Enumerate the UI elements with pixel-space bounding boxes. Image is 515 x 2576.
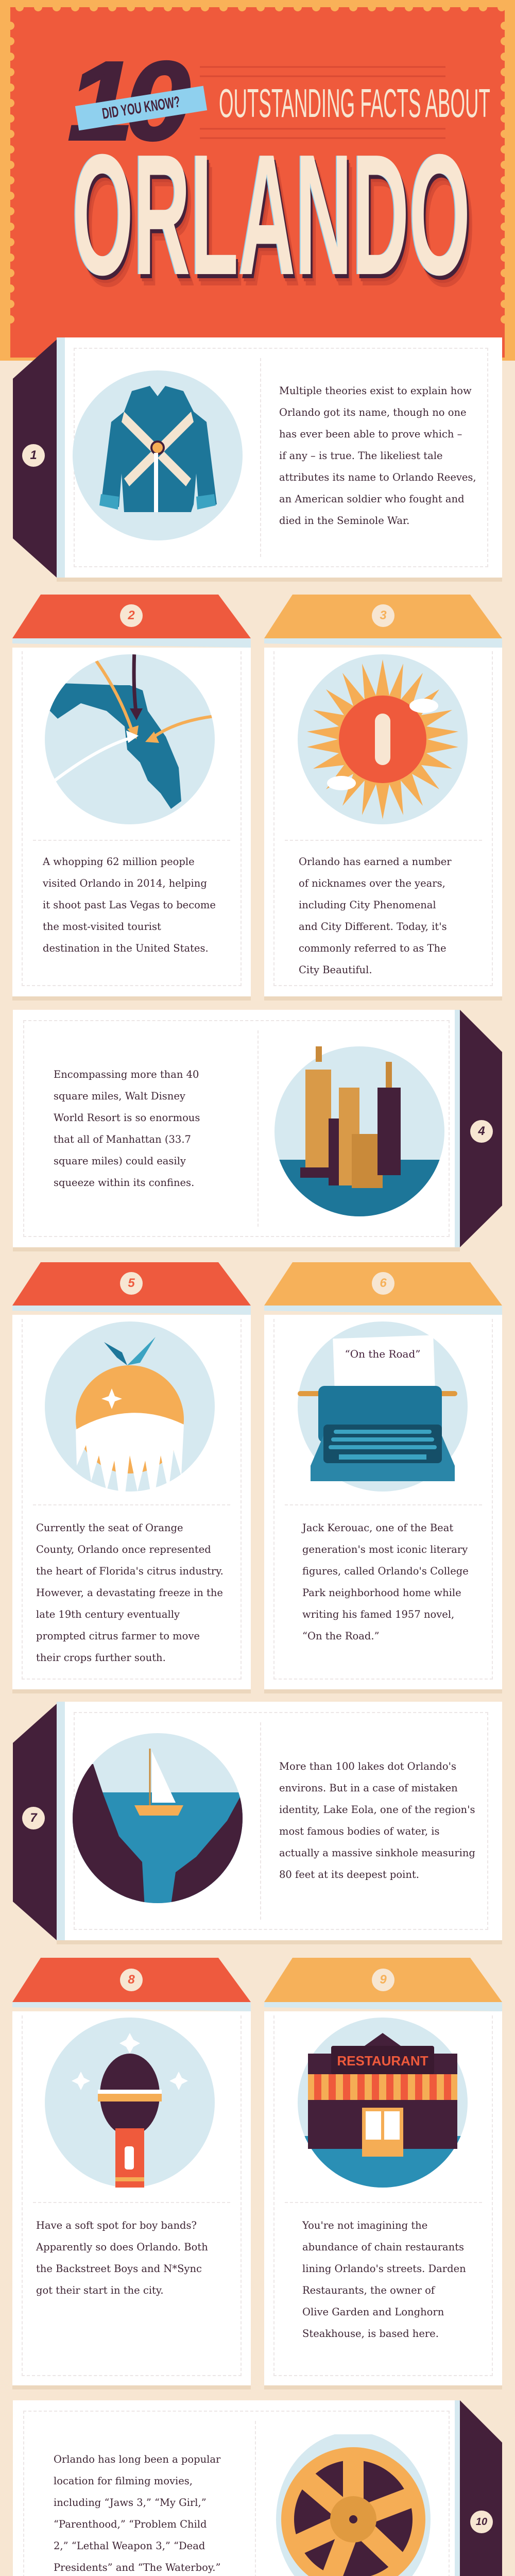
text 4: square miles, Walt Disney (54, 1090, 185, 1102)
card 7 (13, 1702, 502, 1944)
number 4: 4 (478, 1124, 485, 1138)
text 9: Restaurants, the owner of (302, 2284, 435, 2296)
text 8: got their start in the city. (36, 2284, 164, 2296)
text 4: Encompassing more than 40 (54, 1069, 199, 1080)
number 10 (470, 2511, 493, 2533)
text 10 (54, 2453, 220, 2573)
text 6: “On the Road.” (302, 1630, 380, 1642)
text 2 (42, 856, 216, 954)
title ORLANDO: ORLANDO (72, 118, 470, 311)
text 1: Multiple theories exist to explain how (279, 385, 472, 397)
text 7 (279, 1760, 475, 1880)
text 10: Orlando has long been a popular (54, 2453, 220, 2465)
text 9: Steakhouse, is based here. (302, 2328, 439, 2340)
text 2: the most-visited tourist (43, 921, 161, 933)
text 10: 2,” “Lethal Weapon 3,” “Dead (54, 2540, 205, 2552)
number 1: 1 (30, 448, 37, 462)
text 5: However, a devastating freeze in the (36, 1587, 223, 1599)
card 1 (13, 337, 502, 582)
card 9 (264, 1958, 502, 2389)
icon: sun O (298, 654, 468, 824)
banner: did you know (75, 86, 207, 130)
card 4 (13, 1010, 502, 1251)
text 4: square miles) could easily (54, 1155, 186, 1167)
text 3: Orlando has earned a number (299, 856, 452, 868)
subtitle: OUTSTANDING FACTS ABOUT (219, 80, 490, 126)
number 2 (120, 604, 143, 627)
number 3 (372, 604, 394, 627)
card 6 (264, 1262, 502, 1693)
number 6 (372, 1272, 394, 1295)
card 10 (13, 2400, 502, 2576)
icon: jacket (73, 370, 243, 540)
number 6: 6 (380, 1276, 387, 1290)
number 10: 10 (476, 2516, 487, 2528)
text 3: including City Phenomenal (299, 899, 436, 911)
text 5: County, Orlando once represented (36, 1544, 211, 1555)
text 6: writing his famed 1957 novel, (302, 1608, 454, 1620)
text 7: identity, Lake Eola, one of the region's (279, 1804, 475, 1816)
number 2: 2 (128, 608, 135, 622)
icon: typewriter: “On the Road” (345, 1348, 421, 1360)
number 8: 8 (128, 1973, 135, 1987)
text 5: late 19th century eventually (36, 1608, 180, 1620)
text 1 (279, 385, 476, 527)
text 8: Have a soft spot for boy bands? (36, 2219, 197, 2231)
text 10: location for filming movies, (54, 2475, 193, 2487)
number 4 (470, 1120, 493, 1143)
text 4 (54, 1069, 200, 1189)
card 3 (264, 595, 502, 1001)
text 6: figures, called Orlando's College (302, 1565, 469, 1577)
text 5: Currently the seat of Orange (36, 1522, 183, 1534)
text 2: it shoot past Las Vegas to become (43, 899, 216, 911)
number 5 (120, 1272, 143, 1295)
icon: restaurant: RESTAURANT (337, 2053, 428, 2069)
text 6: Park neighborhood home while (302, 1587, 461, 1599)
text 9 (302, 2219, 466, 2340)
text 8 (36, 2219, 208, 2296)
text 9: You're not imagining the (302, 2219, 427, 2231)
text 9: abundance of chain restaurants (302, 2241, 464, 2253)
big number 10: 10 (68, 39, 182, 163)
text 5: the heart of Florida's citrus industry. (36, 1565, 224, 1577)
header: stamp (0, 0, 515, 361)
icon: frozen orange (45, 1321, 215, 1492)
text 7: environs. But in a case of mistaken (279, 1782, 458, 1794)
icon: skyline (274, 1046, 444, 1216)
icon: microphone (45, 2018, 215, 2188)
icon: florida arrows (45, 654, 215, 824)
number 8 (120, 1969, 143, 1991)
text 6: Jack Kerouac, one of the Beat (302, 1522, 453, 1534)
number 3: 3 (380, 608, 387, 622)
text 6 (301, 1522, 469, 1642)
text 7: most famous bodies of water, is (279, 1825, 439, 1837)
text 3 (299, 856, 452, 976)
text 8: Apparently so does Orlando. Both (36, 2241, 208, 2253)
icon: typewriter (298, 1321, 468, 1492)
text 4: World Resort is so enormous (54, 1112, 200, 1124)
text 10: Presidents” and “The Waterboy.” (54, 2562, 220, 2573)
text 6: generation's most iconic literary (302, 1544, 468, 1555)
icon: lake sinkhole (73, 1733, 243, 1903)
text 2: destination in the United States. (43, 942, 209, 954)
text 3: of nicknames over the years, (299, 877, 445, 889)
card 2 (12, 595, 251, 1001)
text 1: if any – is true. The likeliest tale (279, 450, 443, 462)
text 7: actually a massive sinkhole measuring (279, 1847, 475, 1859)
text 5: their crops further south. (36, 1652, 166, 1664)
text 2: A whopping 62 million people (43, 856, 195, 868)
text 9: lining Orlando's streets. Darden (302, 2263, 466, 2275)
text 8: the Backstreet Boys and N*Sync (36, 2263, 202, 2275)
card 5 (12, 1262, 251, 1693)
text 7: More than 100 lakes dot Orlando's (279, 1760, 456, 1772)
text 9: Olive Garden and Longhorn (302, 2306, 444, 2318)
number 7 (22, 1807, 45, 1829)
number 9: 9 (380, 1973, 387, 1987)
banner: did you know: DID YOU KNOW? (101, 93, 181, 123)
text 5 (36, 1522, 224, 1664)
text 4: that all of Manhattan (33.7 (54, 1133, 191, 1145)
text 1: died in the Seminole War. (279, 515, 409, 527)
icon: restaurant (298, 2018, 468, 2188)
text 1: attributes its name to Orlando Reeves, (279, 471, 476, 483)
icon: film reel (276, 2434, 431, 2576)
text 5: prompted citrus farmer to move (36, 1630, 200, 1642)
text 10: “Parenthood,” “Problem Child (54, 2518, 207, 2530)
number 5: 5 (128, 1276, 135, 1290)
card 8 (12, 1958, 251, 2389)
text 1: an American soldier who fought and (279, 493, 465, 505)
text 7: 80 feet at its deepest point. (279, 1869, 419, 1880)
number 1 (22, 444, 45, 467)
number 9 (372, 1969, 394, 1991)
text 3: and City Different. Today, it's (299, 921, 447, 933)
text 3: City Beautiful. (299, 964, 372, 976)
text 10: including “Jaws 3,” “My Girl,” (54, 2497, 207, 2509)
number 7: 7 (30, 1811, 37, 1825)
text 1: Orlando got its name, though no one (279, 406, 467, 418)
text 2: visited Orlando in 2014, helping (43, 877, 207, 889)
text 1: has ever been able to prove which – (279, 428, 462, 440)
text 4: squeeze within its confines. (54, 1177, 194, 1189)
text 3: commonly referred to as The (299, 942, 447, 954)
